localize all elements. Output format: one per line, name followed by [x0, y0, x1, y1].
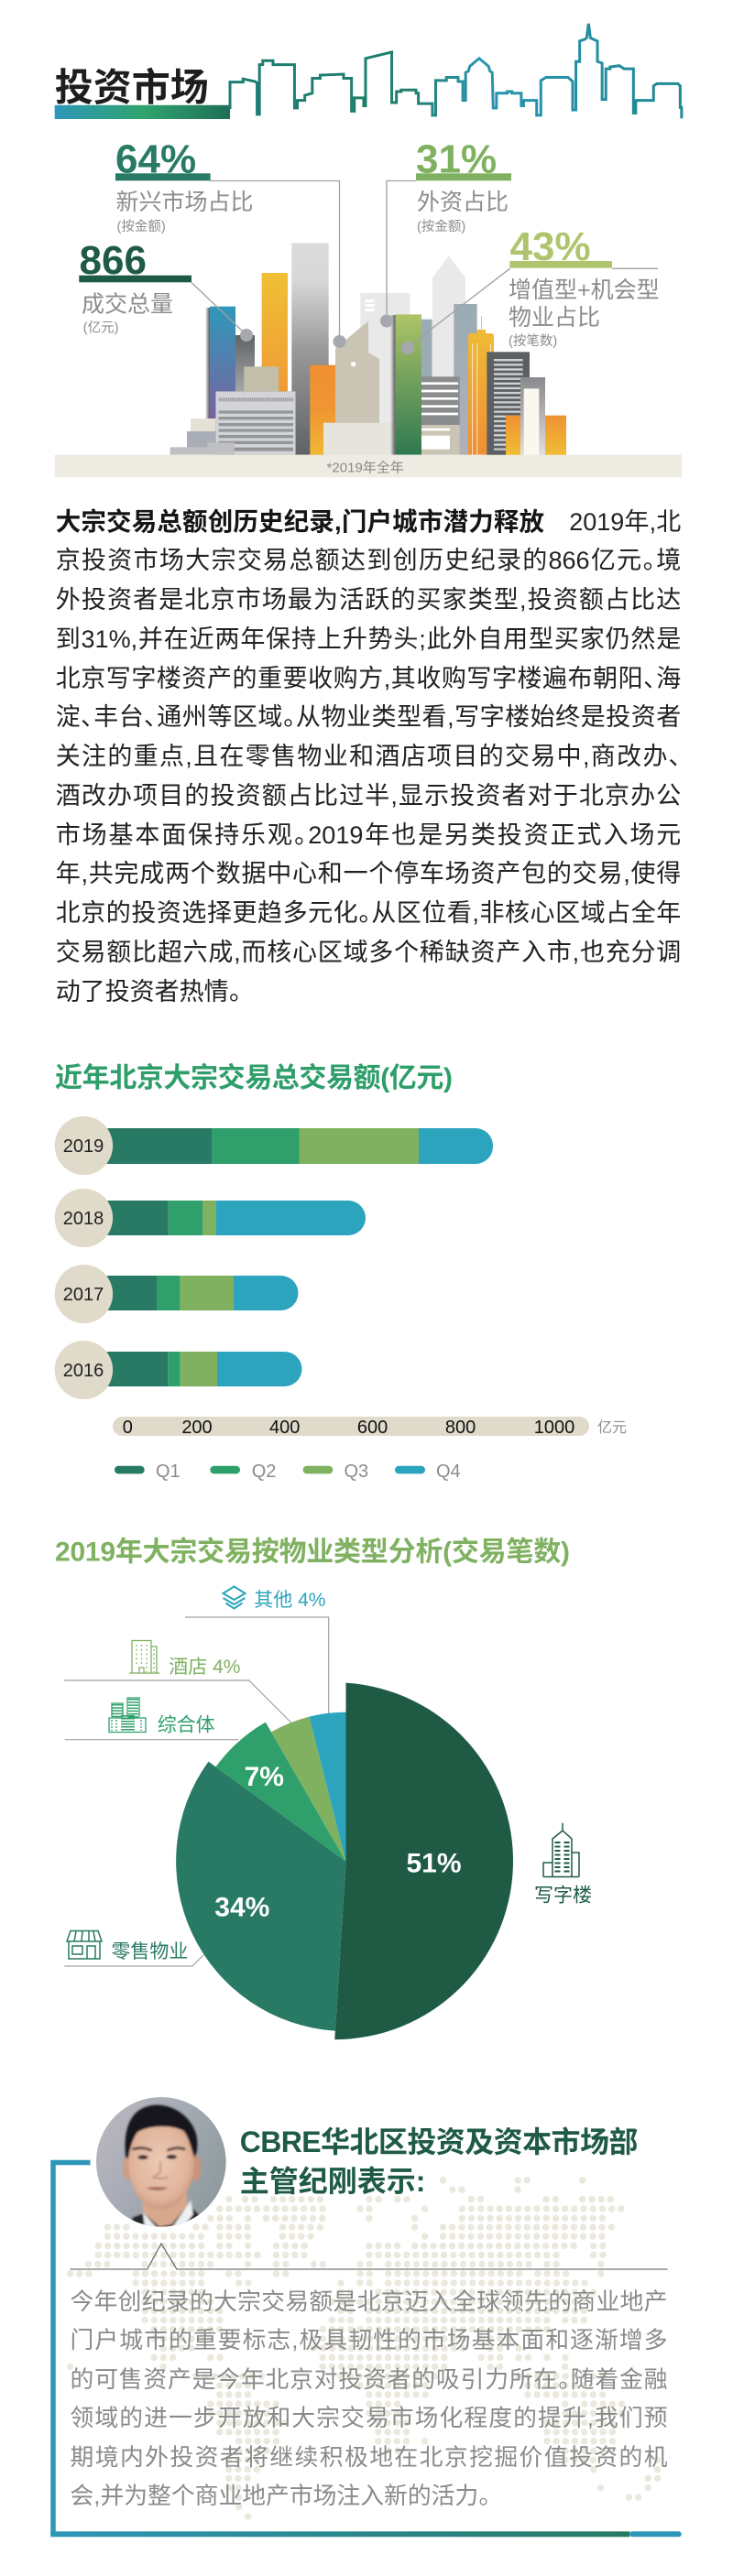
label: other: [224, 1586, 325, 1611]
value axis: 800: [445, 1418, 476, 1438]
slice: mixed 7%: [216, 1723, 346, 1862]
pie chart: 7%: [245, 1762, 284, 1792]
bar 2016: [55, 1341, 301, 1399]
legend: Q1: [156, 1462, 181, 1482]
quote heading: CBRE华北区投资及资本市场部: [240, 2125, 638, 2158]
value axis: [113, 1417, 627, 1438]
stat: 31% foreign capital share: 外资占比: [417, 190, 509, 215]
stat: 64% new market share: (按金额): [117, 219, 166, 234]
pie chart: 51%: [406, 1848, 462, 1879]
quote heading: 主管纪刚表示:: [240, 2165, 425, 2198]
body paragraph: 市场基本面保持乐观。2019年也是另类投资正式入场元: [56, 821, 681, 849]
stat: 43% value-add and opportunistic share: 增值型+机会型: [509, 277, 660, 303]
value axis: 200: [181, 1418, 213, 1438]
label: retail: [67, 1930, 188, 1962]
quote body: 的可售资产是今年北京对投资者的吸引力所在。随着金融: [70, 2367, 667, 2393]
quote body: 会,并为整个商业地产市场注入新的活力。: [70, 2484, 490, 2509]
stat: 31% foreign capital share: (按金额): [417, 219, 465, 234]
quote body: 门户城市的重要标志,极具韧性的市场基本面和逐渐增多: [70, 2328, 667, 2353]
quote body: [70, 2289, 667, 2509]
stat: 64% new market share: 新兴市场占比: [115, 190, 254, 215]
body paragraph: [56, 507, 681, 1005]
chart title: 2019 by property type: 2019年大宗交易按物业类型分析(交易笔数): [55, 1537, 570, 1568]
body paragraph: 大宗交易总额创历史纪录,门户城市潜力释放 2019年,北: [56, 507, 681, 536]
stacked bar chart: [55, 1116, 627, 1482]
pie chart: [176, 1683, 513, 2039]
body paragraph: 北京写字楼资产的重要收购方,其收购写字楼遍布朝阳、海: [56, 665, 681, 692]
stat: 43% value-add and opportunistic share: [401, 224, 660, 354]
label: hotel: [129, 1641, 240, 1678]
quote frame bottom rule: [50, 2531, 682, 2537]
label: retail: 零售物业: [111, 1941, 188, 1962]
label: hotel: 酒店 4%: [169, 1657, 240, 1678]
stat: 64% new market share: [115, 137, 346, 348]
leader lines for pie labels: [64, 1617, 329, 1966]
header gradient bar: [55, 105, 230, 119]
legend: Q3: [345, 1462, 368, 1482]
speech divider with pointer: [70, 2244, 668, 2269]
ground strip with note: *2019年全年: [327, 460, 404, 476]
bar 2016: 2016: [63, 1361, 104, 1381]
icon: hotel building: [129, 1641, 159, 1673]
body paragraph: 到31%,并在近两年保持上升势头;此外自用型买家仍然是: [56, 625, 681, 653]
stat: 31% foreign capital share: 31%: [416, 137, 497, 181]
stat: 866 total volume: [79, 238, 253, 342]
quote body: 今年创纪录的大宗交易额是北京迈入全球领先的商业地产: [70, 2289, 667, 2315]
bar 2019: 2019: [63, 1136, 104, 1157]
city illustration: [170, 243, 566, 455]
dotted world map backdrop: [71, 2180, 658, 2516]
stat: 43% value-add and opportunistic share: 43%: [509, 224, 591, 269]
stat: 866 total volume: (亿元): [83, 321, 118, 335]
body paragraph: 酒改办项目的投资额占比过半,显示投资者对于北京办公: [56, 782, 681, 810]
value axis: 亿元: [597, 1419, 627, 1436]
bar 2018: 2018: [63, 1209, 104, 1229]
icon: mixed use buildings: [109, 1698, 146, 1733]
body paragraph: 年,共完成两个数据中心和一个停车场资产包的交易,使得: [56, 860, 681, 887]
slice: retail 34%: [176, 1762, 346, 2031]
stat: 31% foreign capital share: [380, 137, 511, 328]
bar 2019: [55, 1116, 493, 1175]
value axis: 0: [123, 1418, 133, 1438]
label: office: 写字楼: [534, 1885, 592, 1907]
slice: office 51%: [334, 1683, 513, 2039]
quote body: 领域的进一步开放和大宗交易市场化程度的提升,我们预: [70, 2406, 667, 2431]
pie chart: 34%: [214, 1892, 269, 1922]
quote heading: [240, 2125, 638, 2198]
body paragraph: 交易额比超六成,而核心区域多个稀缺资产入市,也充分调: [56, 939, 681, 966]
quote body: 期境内外投资者将继续积极地在北京挖掘价值投资的机: [70, 2445, 667, 2471]
chart title: bulk transaction volume: 近年北京大宗交易总交易额(亿元): [55, 1063, 453, 1093]
stat: 866 total volume: 成交总量: [82, 291, 173, 317]
stat: 43% value-add and opportunistic share: 物业占比: [509, 305, 600, 331]
bar 2018: [55, 1189, 366, 1247]
body paragraph: 关注的重点,且在零售物业和酒店项目的交易中,商改办、: [56, 743, 681, 770]
quote frame: [53, 2163, 90, 2534]
body paragraph: 京投资市场大宗交易总额达到创历史纪录的866亿元。境: [56, 547, 681, 574]
value axis: 1000: [534, 1418, 574, 1438]
slice: hotel 4%: [271, 1717, 346, 1862]
legend: Q2: [252, 1462, 276, 1482]
value axis: 600: [357, 1418, 388, 1438]
stat: 64% new market share: 64%: [115, 137, 196, 181]
stat: 866 total volume: 866: [79, 238, 147, 283]
skyline outline: [230, 24, 682, 118]
label: office: [534, 1823, 592, 1907]
icon: layers: [224, 1586, 246, 1608]
title: 投资市场: [55, 66, 209, 109]
legend: [115, 1462, 461, 1482]
icon: office tower: [543, 1823, 579, 1877]
label: mixed use: 综合体: [158, 1714, 215, 1736]
bar 2017: 2017: [63, 1285, 104, 1305]
slice: other 4%: [310, 1712, 346, 1862]
body paragraph: 动了投资者热情。: [56, 978, 241, 1005]
ground strip with note: [55, 455, 682, 477]
bar 2017: [55, 1265, 298, 1323]
portrait: [96, 2097, 226, 2227]
value axis: 400: [269, 1418, 300, 1438]
legend: Q4: [436, 1462, 461, 1482]
icon: storefront: [67, 1930, 102, 1959]
stat: 43% value-add and opportunistic share: (按笔数): [509, 333, 557, 349]
label: mixed use: [109, 1698, 215, 1736]
label: other: 其他 4%: [254, 1590, 325, 1611]
section header: 投资市场: [55, 24, 682, 119]
body paragraph: 北京的投资选择更趋多元化。从区位看,非核心区域占全年: [56, 899, 681, 927]
body paragraph: 淀、丰台、通州等区域。从物业类型看,写字楼始终是投资者: [56, 703, 681, 731]
body paragraph: 外投资者是北京市场最为活跃的买家类型,投资额占比达: [56, 586, 681, 614]
